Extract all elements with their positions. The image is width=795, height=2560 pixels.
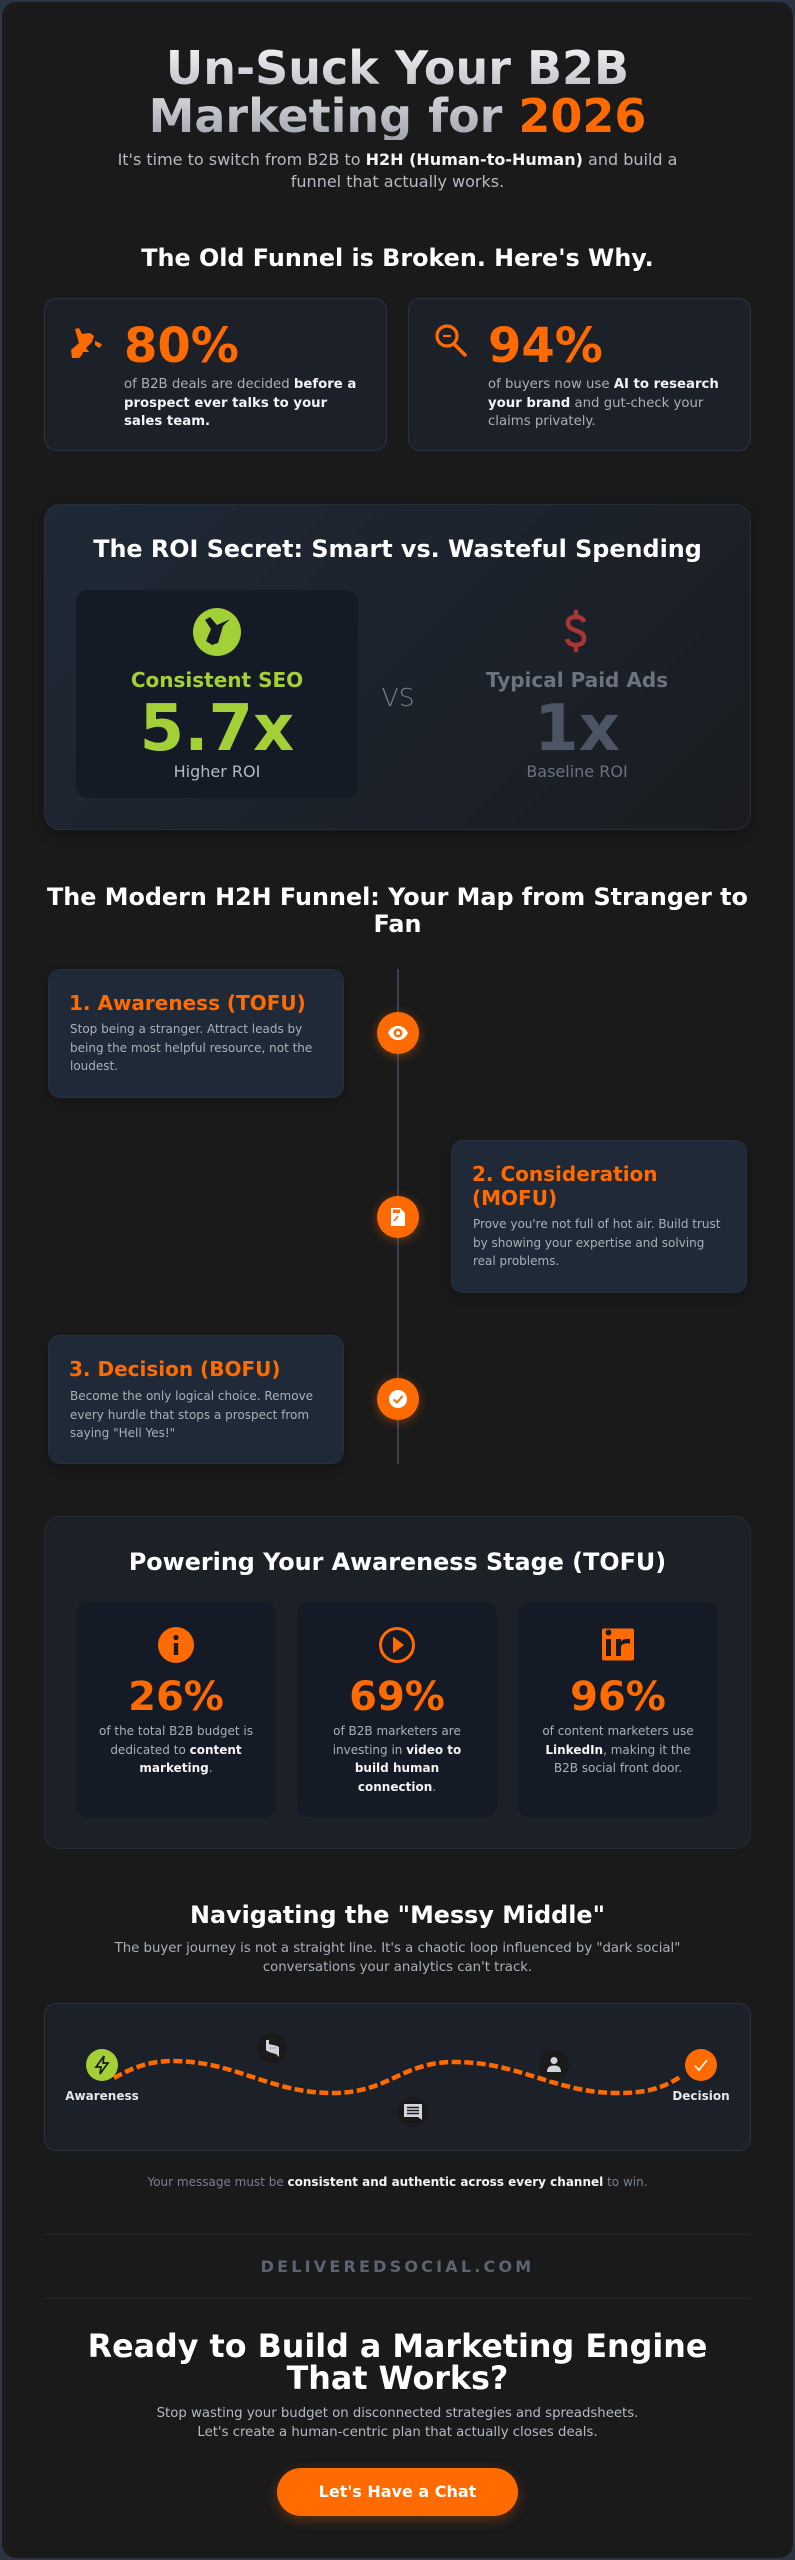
stat description: build human — [355, 1761, 439, 1775]
stat description — [124, 377, 356, 429]
icon: SEO badge — [193, 608, 241, 656]
title: Marketing for — [149, 89, 502, 143]
step title — [472, 1162, 658, 1210]
stat description: marketing. — [139, 1761, 213, 1775]
step description: Prove you're not full of hot air. Build trust — [473, 1217, 720, 1231]
subtitle: funnel that actually works. — [291, 172, 504, 191]
heading: powering awareness: Powering Your Awareness Stage (TOFU) — [129, 1548, 666, 1576]
stat description: investing in video to — [333, 1743, 461, 1757]
icon: rocket — [71, 328, 102, 358]
step description: saying "Hell Yes!" — [70, 1426, 175, 1440]
icon: eye — [376, 1012, 418, 1054]
icon: dollar sign — [564, 610, 586, 652]
button — [277, 2468, 518, 2516]
title — [149, 41, 646, 143]
value: 1x — [534, 692, 620, 766]
funnel timeline line — [396, 969, 399, 1464]
stat description: of B2B deals are decided before a — [124, 377, 356, 392]
journey takeaway: Your message must be consistent and authentic across every channel to win. — [147, 2175, 648, 2189]
step description — [70, 1022, 312, 1073]
call to action text: Let's create a human-centric plan that actually closes deals. — [197, 2425, 598, 2440]
stat value: 96% — [570, 1674, 666, 1720]
panel: typical paid ads — [486, 610, 668, 781]
heading: funnel — [47, 883, 748, 938]
icon: info — [158, 1627, 194, 1663]
icon: person — [539, 2050, 569, 2080]
step description — [70, 1389, 313, 1440]
panel: consistent SEO — [76, 590, 358, 798]
step title: 3. Decision (BOFU) — [69, 1357, 280, 1381]
button: Let's Have a Chat — [319, 2482, 476, 2501]
label: decision: Decision — [672, 2089, 730, 2103]
stat description — [333, 1724, 461, 1794]
stat card: LinkedIn — [518, 1602, 718, 1817]
versus label: VS — [382, 683, 414, 712]
stat description: of B2B marketers are — [333, 1724, 461, 1738]
step description: Become the only logical choice. Remove — [70, 1389, 313, 1403]
value: 5.7x — [140, 692, 294, 766]
brand text: DELIVEREDSOCIAL.COM — [261, 2257, 534, 2276]
step description — [473, 1217, 720, 1268]
stat description — [488, 377, 719, 429]
stat value: 26% — [128, 1674, 224, 1720]
icon: decision check — [685, 2049, 717, 2081]
messy middle intro: conversations your analytics can't track. — [263, 1960, 532, 1975]
stat description: claims privately. — [488, 414, 596, 429]
caption: Higher ROI — [174, 762, 260, 781]
icon: chat bubble — [398, 2097, 428, 2127]
subtitle: It's time to switch from B2B to H2H (Human-to-Human) and build a — [118, 150, 677, 169]
stat description: your brand and gut-check your — [488, 396, 703, 411]
panel: powering awareness — [44, 1516, 751, 1849]
stat value: 94% — [488, 318, 603, 374]
call to action heading: That Works? — [287, 2361, 508, 2397]
stat description: sales team. — [124, 414, 210, 429]
step description: real problems. — [473, 1254, 559, 1268]
icon: check circle — [376, 1378, 418, 1420]
icon: awareness bolt — [86, 2049, 118, 2081]
stat value: 80% — [124, 318, 239, 374]
caption: Baseline ROI — [526, 762, 628, 781]
icon: play — [379, 1627, 415, 1663]
stat description: of content marketers use — [542, 1724, 694, 1738]
heading: messy middle: Navigating the "Messy Middle" — [190, 1901, 605, 1929]
heading: funnel: Fan — [374, 910, 421, 938]
call to action text: Stop wasting your budget on disconnected strategies and spreadsheets. — [157, 2406, 638, 2421]
chart: journey path — [113, 2058, 680, 2096]
stat description: LinkedIn, making it the — [545, 1743, 691, 1757]
icon: document — [376, 1196, 418, 1238]
heading: old funnel: The Old Funnel is Broken. Here's Why. — [141, 244, 654, 272]
footer brand — [44, 2234, 751, 2299]
panel: 94% stat — [408, 298, 751, 451]
stat description: prospect ever talks to your — [124, 396, 327, 411]
subtitle — [118, 150, 677, 191]
label: Typical Paid Ads — [486, 668, 668, 692]
stat description — [99, 1724, 253, 1775]
panel: buyer journey diagram — [44, 2003, 751, 2151]
call to action heading: Ready to Build a Marketing Engine — [88, 2329, 707, 2365]
step description: being the most helpful resource, not the — [70, 1041, 312, 1055]
label: awareness: Awareness — [65, 2089, 139, 2103]
stat card: content marketing — [76, 1602, 276, 1817]
call to action text — [157, 2406, 638, 2440]
title: Un-Suck Your B2B — [166, 41, 629, 95]
stat description — [542, 1724, 694, 1775]
stat description: of buyers now use AI to research — [488, 377, 719, 392]
step title: 1. Awareness (TOFU) — [69, 991, 306, 1015]
icon: magnifier — [435, 324, 467, 357]
stat description: dedicated to content — [110, 1743, 242, 1757]
step title: (MOFU) — [472, 1186, 557, 1210]
stat description: connection. — [358, 1780, 436, 1794]
title: 2026 — [518, 89, 646, 143]
panel: 80% stat — [44, 298, 387, 451]
call to action heading — [88, 2329, 707, 2397]
funnel step 3 — [48, 1335, 344, 1464]
step description: Stop being a stranger. Attract leads by — [70, 1022, 302, 1036]
step title: 2. Consideration — [472, 1162, 658, 1186]
funnel step 2 — [451, 1140, 747, 1293]
stat card: video — [297, 1602, 497, 1817]
stat description: B2B social front door. — [554, 1761, 682, 1775]
stat value: 69% — [349, 1674, 445, 1720]
panel: ROI comparison — [44, 504, 751, 830]
icon: LinkedIn — [602, 1628, 634, 1660]
stat description: of the total B2B budget is — [99, 1724, 253, 1738]
funnel step 1 — [48, 969, 344, 1098]
label: Consistent SEO — [131, 668, 303, 692]
messy middle intro: The buyer journey is not a straight line. It's a chaotic loop influenced by "dark social" — [115, 1941, 680, 1956]
step description: every hurdle that stops a prospect from — [70, 1408, 309, 1422]
icon: speech exchange — [257, 2033, 287, 2063]
heading: funnel: The Modern H2H Funnel: Your Map from Stranger to — [47, 883, 748, 911]
step description: loudest. — [70, 1059, 118, 1073]
messy middle intro — [114, 1941, 680, 1975]
step description: by showing your expertise and solving — [473, 1236, 704, 1250]
heading: ROI: The ROI Secret: Smart vs. Wasteful Spending — [93, 535, 702, 563]
